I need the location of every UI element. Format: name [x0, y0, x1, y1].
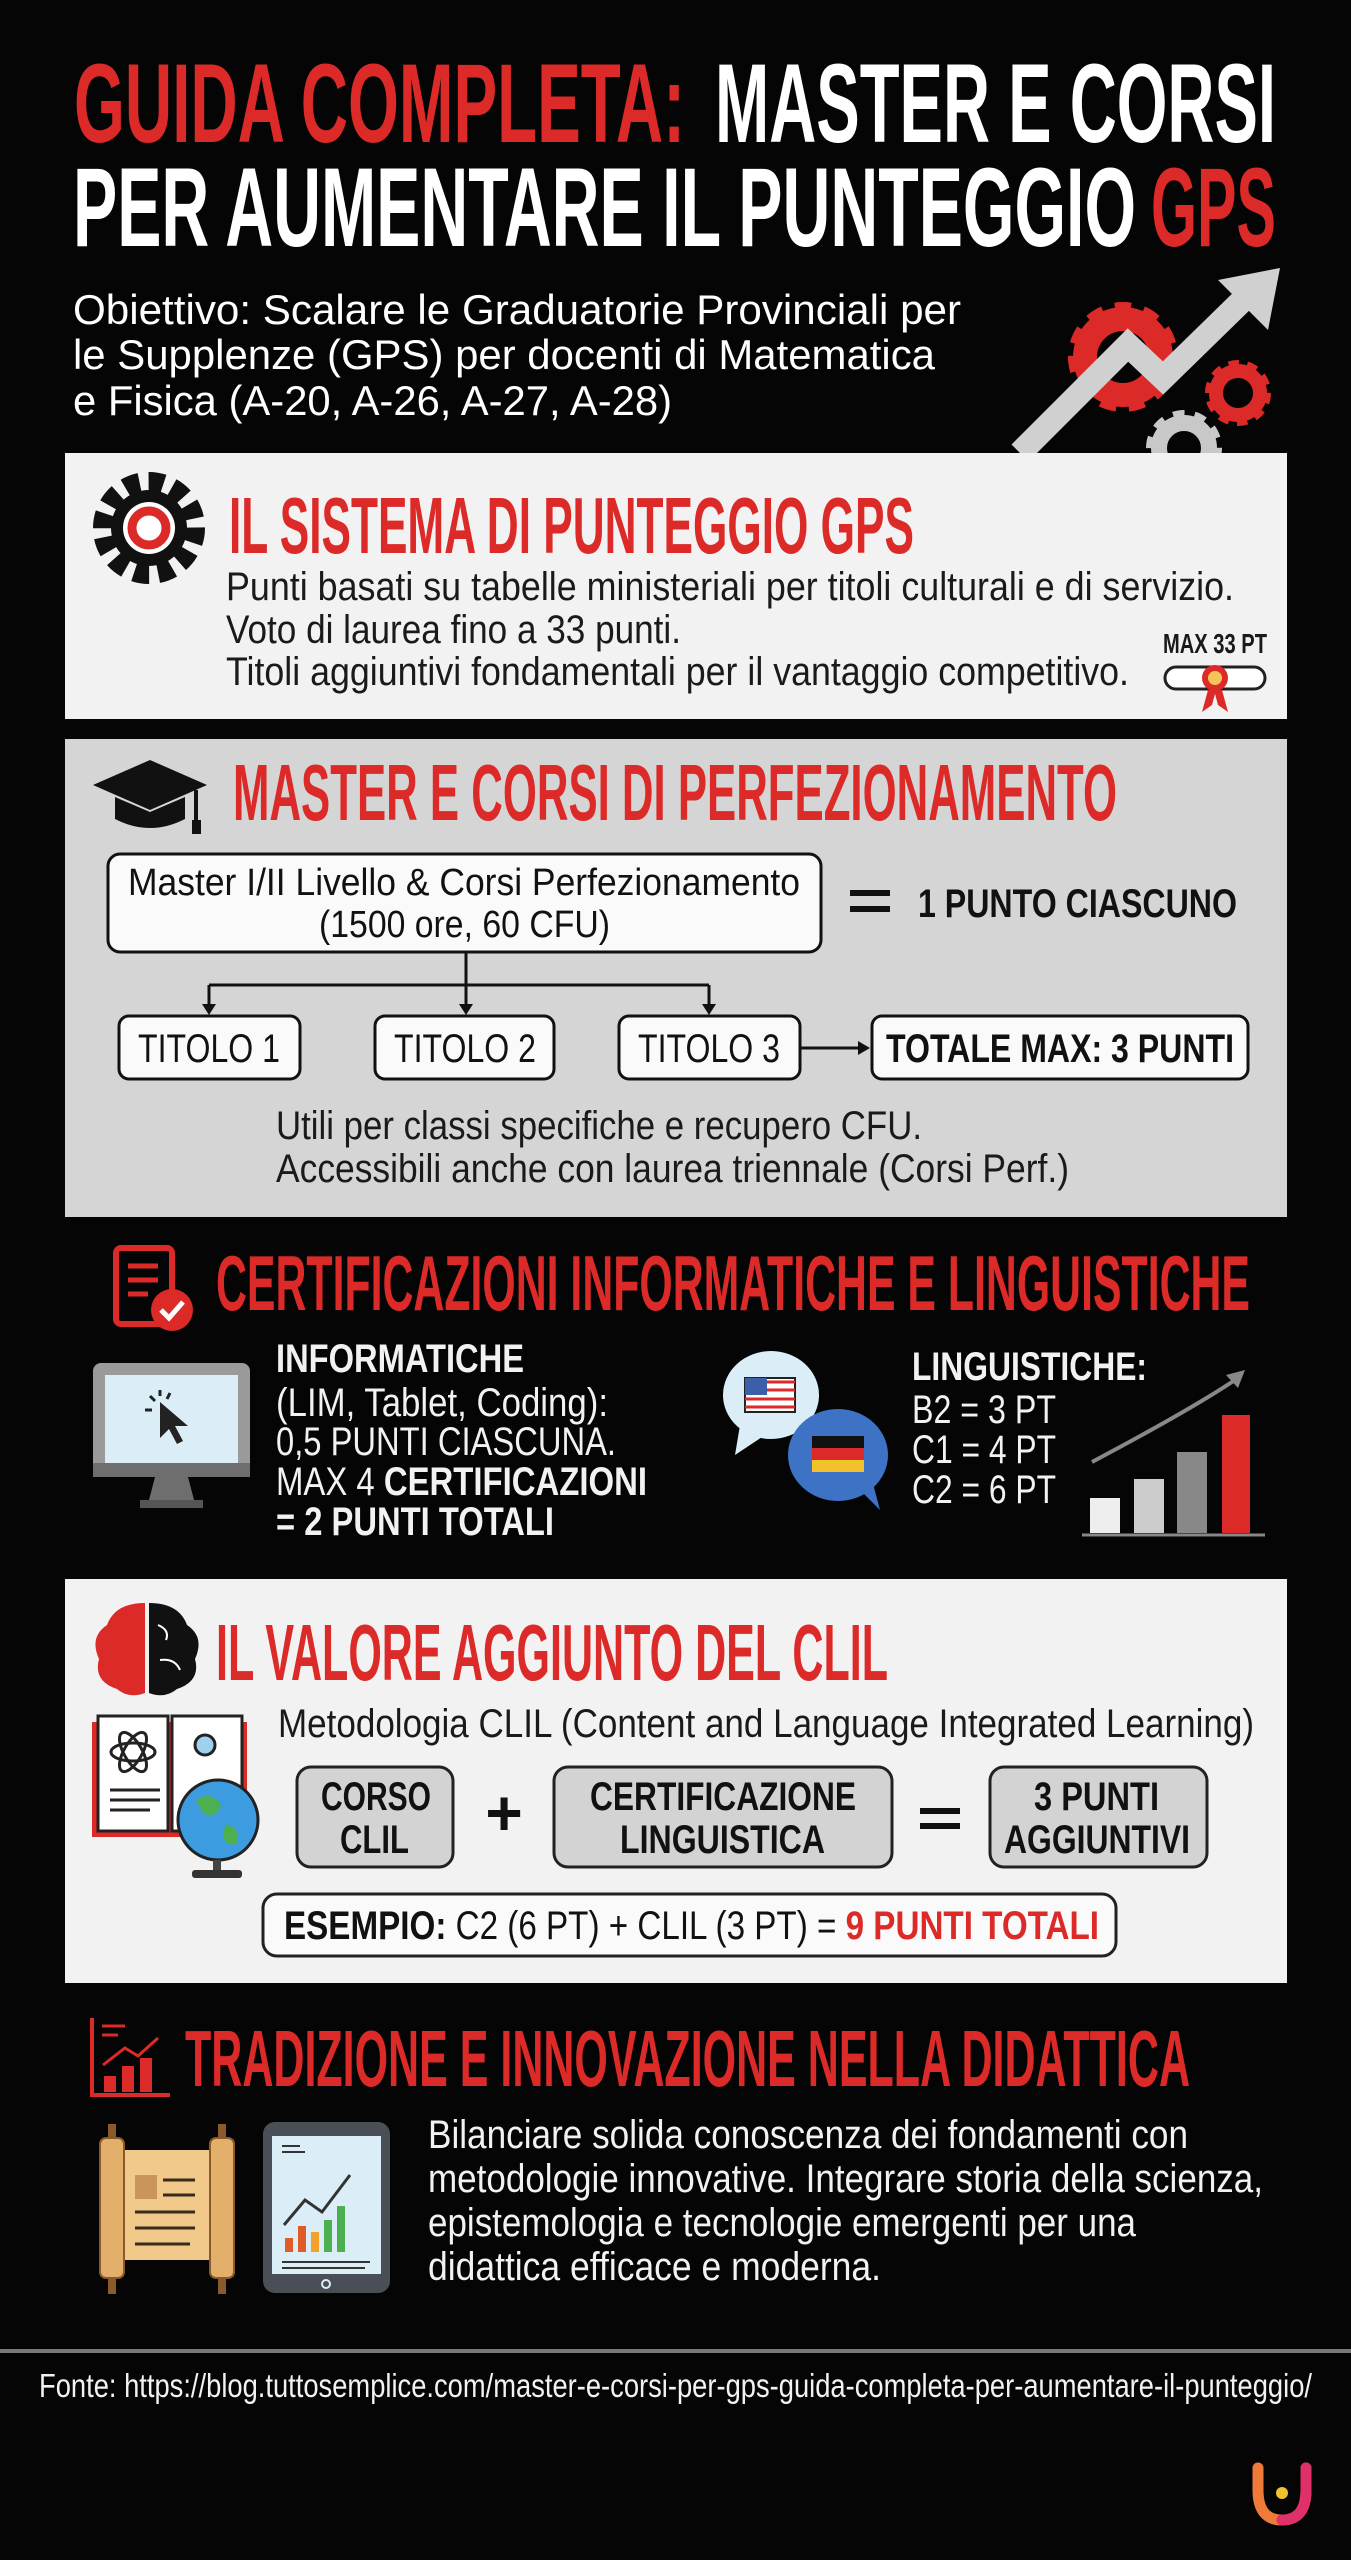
text block: linguistiche: B2 = 3 PT	[912, 1388, 1056, 1432]
text block: informatiche: 0,5 PUNTI CIASCUNA.	[276, 1420, 616, 1464]
text block: linguistiche	[912, 1345, 1147, 1512]
icon: diploma max 33 pt: MAX 33 PT	[1163, 628, 1267, 659]
subtitle	[73, 286, 961, 424]
equation: corso + certificazione = 3 punti: CERTIFICAZIONE	[590, 1775, 856, 1819]
panel: master e corsi	[65, 739, 1287, 1217]
text block: informatiche: INFORMATICHE	[276, 1337, 524, 1381]
equation: corso + certificazione = 3 punti: CLIL	[340, 1818, 409, 1862]
icon: gears and growth arrow	[1020, 268, 1280, 478]
text block	[276, 1104, 1069, 1191]
icon: graduation cap	[93, 760, 207, 834]
icon: gear target	[103, 482, 195, 574]
text block: epistemologia e tecnologie emergenti per una	[428, 2201, 1137, 2245]
icon: document check	[116, 1248, 193, 1331]
text block: linguistiche: C1 = 4 PT	[912, 1428, 1056, 1472]
bar chart	[1082, 1370, 1265, 1535]
boxes: titoli: TITOLO 2	[394, 1027, 536, 1071]
text block: Bilanciare solida conoscenza dei fondamenti con	[428, 2113, 1188, 2157]
title	[73, 41, 1276, 270]
text block	[428, 2113, 1263, 2289]
equals 1 punto	[850, 882, 1237, 926]
callout: esempio	[263, 1894, 1116, 1956]
icon: tablet chart	[263, 2122, 390, 2293]
text block: linguistiche: LINGUISTICHE:	[912, 1345, 1147, 1389]
panel: tradizione e innovazione	[92, 2014, 1263, 2294]
equation: corso + certificazione = 3 punti: +	[485, 1777, 523, 1849]
icon: logo	[1258, 2468, 1306, 2520]
text block: informatiche: (LIM, Tablet, Coding):	[276, 1381, 608, 1425]
text block: Accessibili anche con laurea triennale (Corsi Perf.)	[276, 1147, 1069, 1191]
icon: diploma max 33 pt	[1163, 628, 1267, 712]
arrow: connectors	[202, 952, 870, 1055]
equation: corso + certificazione = 3 punti: AGGIUNTIVI	[1004, 1818, 1190, 1862]
subtitle: le Supplenze (GPS) per docenti di Matematica	[73, 331, 936, 378]
boxes: titoli: TITOLO 3	[638, 1027, 780, 1071]
equation: corso + certificazione = 3 punti: 3 PUNTI	[1034, 1775, 1159, 1819]
boxes: titoli	[119, 1016, 1248, 1079]
panel: certificazioni	[93, 1239, 1265, 1544]
boxes: titoli: TITOLO 1	[138, 1027, 280, 1071]
text block	[226, 565, 1234, 694]
equals 1 punto: 1 PUNTO CIASCUNO	[918, 882, 1237, 926]
callout: esempio: ESEMPIO: C2 (6 PT) + CLIL (3 PT) = 9 PUNTI TOTALI	[284, 1904, 1099, 1948]
equation: corso + certificazione = 3 punti: LINGUISTICA	[620, 1818, 825, 1862]
text block: Voto di laurea fino a 33 punti.	[226, 608, 681, 652]
icon: book and globe	[92, 1716, 258, 1878]
equation: corso + certificazione = 3 punti	[297, 1767, 1207, 1867]
icon: monitor	[93, 1363, 250, 1508]
panel: clil	[65, 1579, 1287, 1983]
text block: informatiche	[276, 1337, 647, 1544]
icon: scroll	[100, 2124, 234, 2294]
panel: sistema di punteggio	[65, 453, 1287, 719]
title: GUIDA COMPLETA:	[74, 41, 685, 166]
text block: Titoli aggiuntivi fondamentali per il vantaggio competitivo.	[226, 650, 1129, 694]
text block: informatiche: = 2 PUNTI TOTALI	[276, 1500, 554, 1544]
icon: chart	[92, 2018, 170, 2095]
text block: Utili per classi specifiche e recupero CFU.	[276, 1104, 922, 1148]
box: master: Master I/II Livello & Corsi Perfezionamento	[128, 862, 800, 904]
text block: linguistiche: C2 = 6 PT	[912, 1468, 1056, 1512]
box: master: (1500 ore, 60 CFU)	[319, 904, 610, 946]
text block: informatiche: MAX 4 CERTIFICAZIONI	[276, 1460, 647, 1504]
boxes: titoli: TOTALE MAX: 3 PUNTI	[886, 1027, 1234, 1071]
text block: didattica efficace e moderna.	[428, 2245, 881, 2289]
text block: Punti basati su tabelle ministeriali per titoli culturali e di servizio.	[226, 565, 1234, 609]
icon: language bubbles	[723, 1351, 888, 1510]
subtitle: e Fisica (A-20, A-26, A-27, A-28)	[73, 377, 672, 424]
subtitle: Obiettivo: Scalare le Graduatorie Provinciali per	[73, 286, 961, 333]
icon: brain	[95, 1603, 199, 1695]
box: master	[108, 854, 821, 952]
equation: corso + certificazione = 3 punti: CORSO	[321, 1775, 431, 1819]
